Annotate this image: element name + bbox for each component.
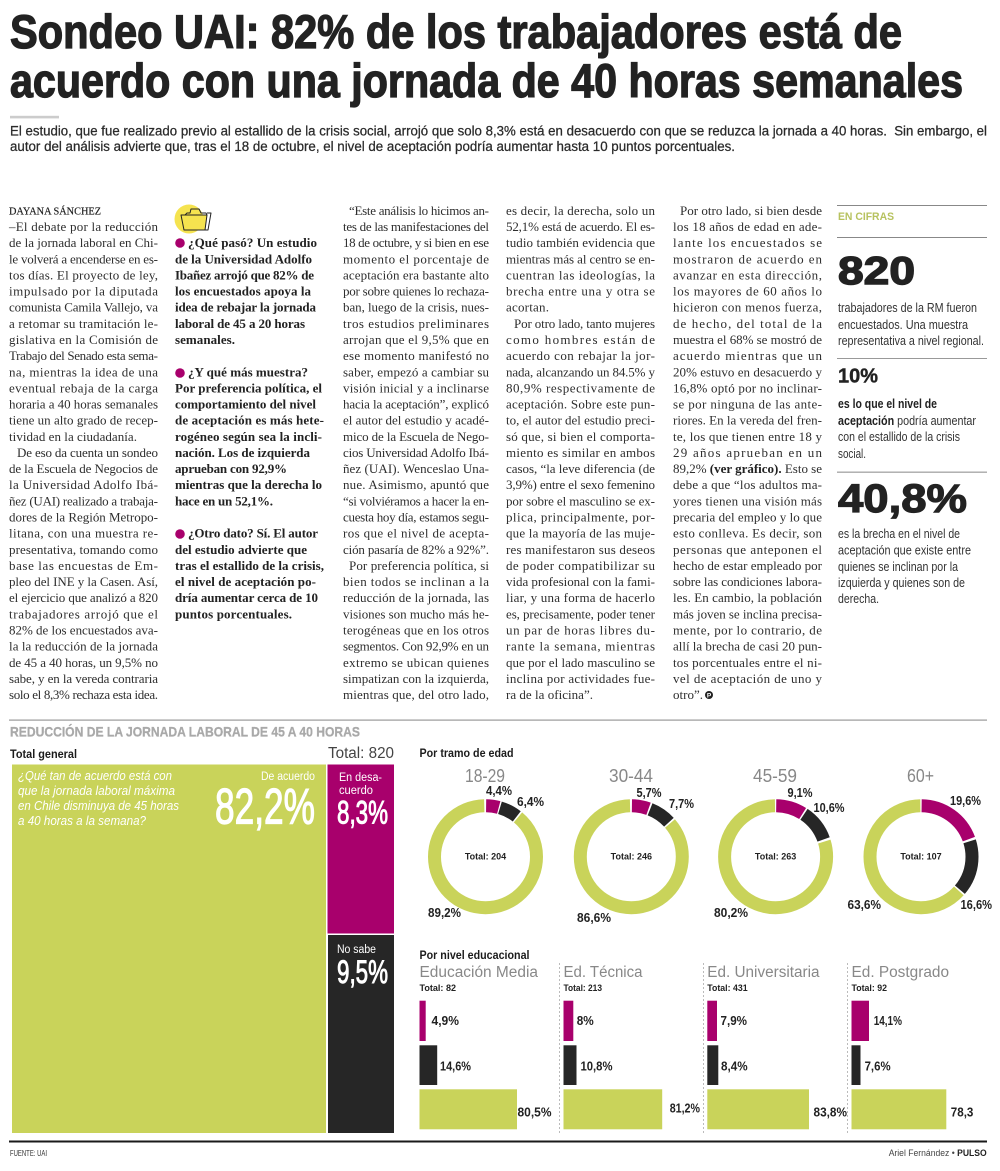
footer: credit: Ariel Fernández • PULSO	[889, 1148, 987, 1158]
donut chart: 30-44: 7,7%	[669, 797, 694, 811]
title: Sondeo UAI: 82% de los trabajadores está de	[10, 5, 902, 58]
article column 1: solo el 8,3% rechaza esta idea.	[9, 687, 158, 702]
stat: 10%: aceptación podría aumentar	[838, 414, 976, 428]
article column 5: les. En cambio, la población	[673, 590, 822, 605]
stat: 10%: con el estallido de la crisis	[838, 430, 960, 444]
article column 3: segmentos. Con 92,9% en un	[343, 639, 490, 654]
bar chart: educación media: 14,6%	[440, 1060, 471, 1074]
bar chart: ed. técnica: Total: 213	[564, 983, 602, 993]
article column 1: comunista Camila Vallejo, va	[9, 300, 158, 315]
article column 3	[343, 203, 490, 702]
article column 4	[506, 203, 656, 702]
stat: 820	[838, 250, 984, 348]
bar chart: ed. técnica	[564, 964, 700, 1129]
article column 3: hacia la aceptación”, explicó	[343, 396, 489, 412]
bar chart: educación media: 80,5%	[518, 1106, 552, 1120]
article column 5: se por ninguna de las ante-	[673, 396, 822, 412]
article column 5: acuerdo mientras que un	[673, 348, 822, 363]
segment: de acuerdo: 82,2%	[215, 778, 315, 834]
question: y qué más muestra: comportamiento del nivel	[175, 396, 316, 412]
article column 3: ción pasaría de 82% a 92%”.	[343, 542, 489, 557]
article column 3: nue. Asimismo, apuntó que	[343, 477, 489, 492]
deck: summary paragraph: El estudio, que fue realizado previo al estallido de la crisis social, arrojó que solo 8,3% está en desacuerdo con que se reduzca la jornada a 40 horas. Sin embargo, el	[10, 124, 987, 138]
question: qué pasó: Ibañez arrojó que 82% de	[175, 267, 314, 282]
bar chart: ed. universitaria: Ed. Universitaria	[707, 964, 820, 981]
segment: de acuerdo: De acuerdo	[261, 771, 315, 783]
article column 5: mostraron de acuerdo en	[673, 251, 822, 266]
question: y qué más muestra: de aceptación es más hete-	[175, 413, 324, 428]
question: y qué más muestra: Por preferencia política, el	[175, 380, 322, 395]
article column 1: sabe, y en la vereda contraria	[9, 671, 158, 686]
article column 1: 82% de los encuestados ava-	[9, 622, 158, 638]
article column 3: tros estudios preliminares	[343, 316, 489, 331]
article column 3: Por preferencia política, si	[349, 558, 489, 573]
article column 1: de 45 a 40 horas, un 9,5% no	[9, 655, 158, 670]
question: y qué más muestra: hace en un 52,1%.	[175, 493, 273, 508]
question: qué pasó: semanales.	[175, 332, 235, 347]
article column 4: acuerdo con rebajar la jor-	[506, 348, 655, 363]
stat: 820: trabajadores de la RM fueron	[838, 301, 977, 315]
question: y qué más muestra: rogéneo según sea la incli-	[175, 429, 322, 444]
deck: summary paragraph	[10, 116, 987, 154]
question: otro dato: dría aumentar cerca de 10	[175, 590, 318, 605]
article column 5: P	[707, 692, 712, 700]
panel: key questions	[175, 235, 324, 621]
article column 4: Por otro lado, tanto mujeres	[514, 316, 655, 331]
heading: por tramo de edad: Por tramo de edad	[420, 746, 514, 760]
article column 1: na, mientras la idea de una	[9, 364, 158, 379]
bar chart: ed. universitaria: 83,8%	[814, 1106, 847, 1120]
bar chart: educación media	[420, 964, 552, 1129]
donut chart: 60+: Total: 107	[900, 852, 942, 862]
article column 5: vel de aceptación de uno y	[673, 671, 822, 686]
stat: 40,8%: quienes se inclinan por la	[838, 560, 958, 574]
article column 5: los 18 años de edad en ade-	[673, 219, 822, 234]
article column 5: allí la brecha de casi 20 pun-	[673, 639, 822, 654]
segment: en desacuerdo: cuerdo	[339, 785, 373, 797]
bar chart: educación media: Total: 82	[420, 983, 456, 993]
question: qué pasó: laboral de 45 a 20 horas	[175, 316, 305, 331]
article column 4: de poder compatibilizar su	[506, 558, 656, 573]
question: qué pasó: ¿Qué pasó? Un estudio	[188, 235, 317, 250]
article column 1: tos días. El proyecto de ley,	[9, 267, 158, 282]
bar chart: ed. universitaria: Total: 431	[707, 983, 748, 993]
chart: treemap total general: Total: 820	[328, 745, 394, 762]
donut chart: 30-44: Total: 246	[611, 852, 652, 862]
article column 5: hicieron con menos fuerza,	[673, 300, 822, 315]
article column 5: mente, por lo contrario, de	[673, 622, 822, 638]
question: y qué más muestra: mientras que la derecha lo	[175, 477, 322, 492]
donut chart: 45-59: 9,1%	[788, 786, 812, 800]
bar chart: ed. técnica: 10,8%	[580, 1060, 612, 1074]
donut chart: 45-59	[714, 766, 844, 920]
article column 3: “Este análisis lo hicimos an-	[349, 203, 489, 218]
article column 4: aceptación. Sobre este pun-	[506, 396, 655, 412]
donut chart: 45-59: Total: 263	[755, 852, 796, 862]
article column 3: ñez (UAI). Wenceslao Una-	[343, 461, 489, 476]
article column 1: el ejercicio que analizó a 820	[9, 590, 158, 605]
article column 3: cios Universidad Adolfo Ibá-	[343, 445, 489, 460]
segment: de acuerdo	[12, 764, 326, 1133]
article column 3: mientras que, del otro lado,	[343, 687, 489, 702]
article column 3: aceptación era bastante alto	[343, 267, 489, 282]
article column 3: simpatizan con la izquierda,	[343, 671, 489, 686]
segment: de acuerdo: en Chile disminuya de 45 horas	[18, 799, 179, 813]
article column 1: De eso da cuenta un sondeo	[17, 445, 158, 460]
bar chart: ed. postgrado: 7,6%	[865, 1060, 891, 1074]
article column 4: brecha entre una y otra se	[506, 284, 655, 299]
article column 5: yores tienen una visión más	[673, 493, 822, 508]
donut chart: 30-44: 30-44	[609, 766, 653, 786]
article column 1: presentativa, tomando como	[9, 542, 158, 557]
article column 5: 89,2% (ver gráfico). Esto se	[673, 461, 822, 476]
question: qué pasó: los encuestados apoya la	[175, 284, 312, 299]
stat: 10%: social.	[838, 447, 866, 461]
stat: 820: 820	[838, 250, 915, 293]
article column 4: como hombres están de	[506, 332, 655, 347]
chart heading: REDUCCIÓN DE LA JORNADA LABORAL DE 45 A 40 HORAS	[10, 722, 360, 740]
question: otro dato	[175, 526, 324, 621]
article column 4: cuentran las ideologías, la	[506, 267, 655, 282]
article column 3: terogéneas que en los otros	[343, 622, 489, 638]
stat: 820: encuestados. Una muestra	[838, 318, 968, 332]
bar chart: ed. universitaria: 8,4%	[721, 1060, 748, 1074]
article column 4: que por el lado masculino se	[506, 655, 655, 670]
donut chart: 18-29: 18-29	[465, 766, 505, 786]
article column 1: Trabajo del Senado esta sema-	[9, 348, 158, 363]
bar chart: ed. postgrado: Ed. Postgrado	[852, 964, 949, 981]
article column 4: que la mayoría de las muje-	[506, 526, 655, 541]
question: y qué más muestra: ¿Y qué más muestra?	[188, 364, 308, 379]
donut chart: 18-29	[428, 766, 544, 920]
article column 5: esto conlleva. Es decir, son	[673, 526, 822, 541]
article column 4: to, el autor del estudio preci-	[506, 413, 655, 428]
article column 4: es, precisamente, poder tener	[506, 606, 656, 621]
article column 5: debe a que “los adultos ma-	[673, 477, 822, 492]
article column 4: liar, y una forma de hacerlo	[506, 590, 655, 605]
bar chart: ed. postgrado	[852, 964, 973, 1129]
article column 5	[673, 203, 823, 702]
article column 5: otro”.	[673, 687, 703, 702]
donut chart: 18-29: Total: 204	[465, 852, 506, 862]
bar chart: ed. técnica: 8%	[577, 1014, 594, 1028]
donut chart: 45-59: 45-59	[753, 766, 797, 786]
stat: 40,8%: derecha.	[838, 592, 879, 606]
article column 3: el autor del estudio y acadé-	[343, 413, 489, 428]
donut chart: 60+: 19,6%	[950, 794, 981, 808]
article column 1: eventual rebaja de la carga	[9, 380, 158, 395]
article column 5: avanzar en esta dirección,	[673, 267, 822, 282]
question: qué pasó	[175, 235, 317, 347]
bar chart: ed. universitaria: 7,9%	[720, 1014, 747, 1028]
article column 1: de la jornada laboral en Chi-	[9, 235, 158, 250]
article column 1: impulsado por la diputada	[9, 284, 158, 299]
article column 4: 80,9% respectivamente de	[506, 380, 655, 395]
article column 5: precaria del empleo y lo que	[673, 510, 822, 524]
heading: en cifras: EN CIFRAS	[838, 211, 894, 223]
article column 5: 29 años aprueban en un	[673, 445, 822, 460]
article column 5: Por otro lado, si bien desde	[680, 203, 822, 218]
chart: treemap total general	[10, 745, 394, 1133]
donut chart: 18-29: 6,4%	[517, 795, 544, 809]
segment: no sabe: 9,5%	[337, 954, 388, 990]
donut chart: 30-44: 86,6%	[577, 911, 611, 925]
segment: en desacuerdo: 8,3%	[337, 794, 388, 830]
article column 4: res manifestaron sus deseos	[506, 542, 655, 557]
segment: de acuerdo: ¿Qué tan de acuerdo está con	[18, 769, 172, 783]
stat: 10%	[838, 366, 976, 461]
donut chart: 30-44: 5,7%	[636, 786, 662, 800]
segment: no sabe: No sabe	[337, 944, 376, 956]
article column 4: 3,9%) entre el sexo femenino	[506, 477, 655, 492]
donut chart: 60+: 16,6%	[960, 898, 992, 912]
chart: treemap total general: Total general	[10, 747, 77, 761]
bar chart: ed. postgrado: 78,3	[951, 1106, 973, 1120]
donut chart: 18-29: 4,4%	[486, 784, 512, 798]
article column 3: extremo se ubican quienes	[343, 655, 489, 670]
donut chart: 45-59: 80,2%	[714, 906, 748, 920]
bar chart: ed. técnica: Ed. Técnica	[564, 964, 643, 981]
article column 1: gislativa en la Comisión de	[9, 332, 158, 347]
article column 3: cuesta hoy día, estamos segu-	[343, 510, 489, 524]
stat: 10%: es lo que el nivel de	[838, 397, 937, 411]
icon: yellow folder	[174, 204, 211, 234]
article column 1: pleo del INE y la Casen. Así,	[9, 574, 158, 589]
article column 4: mientras más al centro se en-	[506, 251, 655, 266]
question: qué pasó: de la Universidad Adolfo	[175, 251, 312, 266]
article column 5: 16,8% optó por no inclinar-	[673, 380, 822, 395]
bar chart: educación media: 4,9%	[432, 1014, 459, 1028]
article column 5: de hecho, del total de la	[673, 316, 822, 331]
donut chart: 60+: 60+	[907, 766, 934, 786]
article column 3: tes de las manifestaciones del	[343, 219, 489, 234]
bar chart: ed. técnica: 81,2%	[670, 1102, 700, 1116]
article column 5: lante los encuestados se	[673, 235, 822, 250]
article column 3: 18 de octubre, y si bien en ese	[343, 235, 489, 250]
article column 5: riores. En la vereda del fren-	[673, 413, 822, 428]
stat: 40,8%: izquierda y quienes son de	[838, 576, 965, 590]
article column 1: ñez (UAI) realizado a trabaja-	[9, 493, 158, 508]
article column 4: es decir, la derecha, solo un	[506, 203, 656, 218]
article column 5: sobre las condiciones labora-	[673, 574, 822, 589]
question: y qué más muestra	[175, 364, 324, 508]
article column 1: horaria a 40 horas semanales	[9, 396, 158, 412]
question: y qué más muestra: nación. Los de izquierda	[175, 445, 310, 460]
article column 3: bien todos se inclinan a la	[343, 574, 489, 589]
article column 1: trabajadores arrojó que el	[9, 606, 158, 621]
question: otro dato: ¿Otro dato? Sí. El autor	[188, 526, 318, 541]
heading: por nivel educacional: Por nivel educacional	[420, 948, 530, 962]
bar chart: educación media: Educación Media	[420, 964, 538, 981]
article column 1: de la Escuela de Negocios de	[9, 461, 158, 476]
question: otro dato: el nivel de aceptación po-	[175, 574, 316, 589]
article column 1: base las encuestas de Em-	[9, 558, 158, 573]
article column 4: por sobre el masculino se ex-	[506, 493, 655, 508]
segment: de acuerdo: que la jornada laboral máxima	[18, 784, 175, 798]
question: otro dato: tras el estallido de la crisis,	[175, 558, 324, 573]
article column 4: vida profesional con la fami-	[506, 574, 655, 589]
donut chart: 45-59: 10,6%	[814, 801, 844, 815]
article column 4: rante la semana, mientras	[506, 639, 655, 654]
article column 4: plica, principalmente, por-	[506, 510, 655, 524]
article column 3: ban, luego de la crisis, nues-	[343, 300, 489, 315]
stat: 40,8%: es la brecha en el nivel de	[838, 527, 960, 541]
question: otro dato: puntos porcentuales.	[175, 606, 292, 621]
bar chart: ed. postgrado: 14,1%	[874, 1014, 902, 1028]
article column 5: hecho de estar empleado por	[673, 558, 823, 573]
stat: 40,8%: aceptación que existe entre	[838, 544, 971, 558]
article column 5: 20% estuvo en desacuerdo y	[673, 364, 822, 379]
footer: source: FUENTE: UAI	[10, 1148, 47, 1158]
question: qué pasó: idea de rebajar la jornada	[175, 300, 316, 315]
donut chart: 60+	[848, 766, 992, 912]
stat: 40,8%: 40,8%	[838, 477, 967, 521]
article column 5: te, los que tienen entre 18 y	[673, 429, 822, 444]
segment: en desacuerdo	[328, 764, 394, 934]
donut chart: 30-44	[577, 766, 694, 925]
bar chart: ed. postgrado: Total: 92	[852, 983, 887, 993]
stat: 40,8%	[838, 477, 971, 606]
article column 5: muestra el 68% se mostró de	[673, 332, 822, 347]
article column 4: tudio también evidencia que	[506, 235, 655, 250]
stat: 10%: 10%	[838, 366, 878, 388]
article column 1: dores de la Región Metropo-	[9, 510, 158, 524]
article column 1	[8, 206, 158, 702]
article column 1: tividad en la ciudadanía.	[9, 429, 137, 444]
segment: no sabe	[328, 935, 394, 1133]
panel: en cifras	[837, 205, 987, 606]
article column 1: –El debate por la reducción	[8, 219, 158, 234]
article column 1: a retomar su tramitación le-	[9, 316, 158, 331]
article column 4: inclina por actividades fue-	[506, 671, 655, 686]
title	[10, 5, 963, 107]
bar chart: ed. universitaria	[707, 964, 847, 1129]
deck: summary paragraph: autor del análisis advierte que, tras el 18 de octubre, el nivel de aceptación podría aumentar hasta 10 puntos porcentuales.	[10, 139, 735, 154]
article column 5: personas que anteponen el	[673, 542, 822, 557]
article column 4: nada, alcanzando un 84.5% y	[506, 364, 656, 379]
article column 3: visiones son mucho más he-	[343, 606, 489, 621]
article column 3: reducción de la jornada, las	[343, 590, 489, 605]
article column 1: la la reducción de la jornada	[9, 639, 158, 654]
article column 3: ese momento manifestó no	[343, 348, 489, 363]
article column 1: la Universidad Adolfo Ibá-	[9, 477, 158, 492]
byline: DAYANA SÁNCHEZ	[9, 206, 101, 218]
article column 4: acortan.	[506, 300, 549, 315]
question: otro dato: del estudio advierte que	[175, 542, 307, 557]
segment: de acuerdo: a 40 horas a la semana?	[18, 814, 146, 828]
donut chart: 18-29: 89,2%	[428, 906, 461, 920]
article column 5: los mayores de 60 años lo	[673, 284, 822, 299]
article column 3: momento el porcentaje de	[343, 251, 489, 266]
article column 5: más joven se inclina precisa-	[673, 606, 822, 621]
article column 3: por sobre quienes lo rechaza-	[343, 284, 489, 299]
article column 5: tos porcentuales entre el ni-	[673, 655, 822, 670]
donut chart: 60+: 63,6%	[848, 898, 881, 912]
article column 4: só que, si bien el comporta-	[506, 429, 655, 444]
article column 4: un par de horas libres du-	[506, 622, 655, 638]
article column 3: arrojan que el 9,5% que en	[343, 332, 490, 347]
article column 3: mico de la Escuela de Nego-	[343, 429, 489, 444]
article column 3: saber, empezó a cambiar su	[343, 364, 490, 379]
article column 3: visión inicial y a inclinarse	[343, 380, 489, 395]
question: y qué más muestra: aprueban con 92,9%	[175, 461, 287, 476]
article column 1: le volverá a encenderse en es-	[9, 251, 158, 266]
article column 4: 52,1% está de acuerdo. El es-	[506, 219, 655, 234]
article column 3: ros que el nivel de acepta-	[343, 526, 489, 541]
article column 4: miento es similar en ambos	[506, 445, 655, 460]
article column 1: litana, con una muestra re-	[9, 526, 158, 541]
segment: en desacuerdo: En desa-	[339, 772, 382, 784]
article column 4: ra de la oficina”.	[506, 687, 593, 702]
article column 4: casos, “la leve diferencia (de	[506, 461, 655, 476]
article column 3: “si volviéramos a hacer la en-	[343, 493, 489, 508]
article column 1: tiene un alto grado de recep-	[9, 413, 158, 428]
